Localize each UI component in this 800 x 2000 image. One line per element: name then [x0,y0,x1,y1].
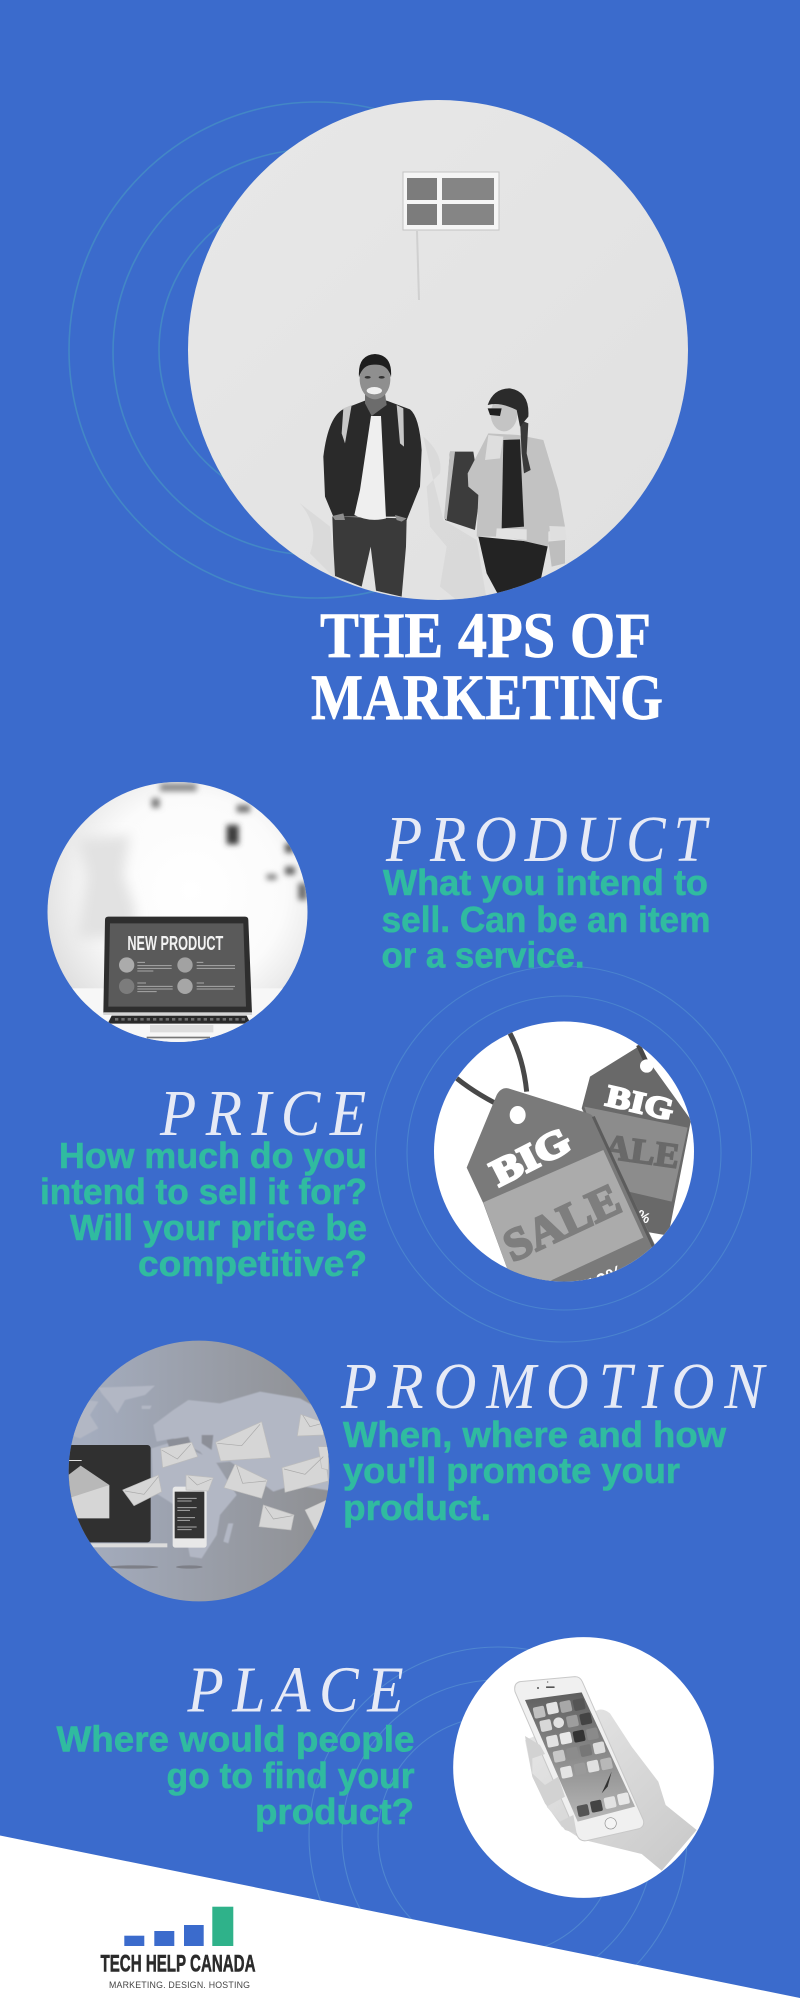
white footer wedge [0,1836,800,2000]
heading: price: PRICE [159,1076,366,1150]
text: place description: go to find your [166,1755,414,1796]
text: place description: Where would people [56,1718,415,1760]
laptop: NEW PRODUCT [127,933,223,955]
heading: place: PLACE [187,1653,404,1726]
decorative rings: place [309,1647,687,2000]
back tag: % [634,1207,653,1227]
hand [525,1710,697,1871]
world map [70,1386,337,1558]
heading: product: PRODUCT [385,802,710,876]
promotion image: emails flying over world map [68,1340,330,1602]
title [311,600,663,734]
back tag: ALE [602,1127,682,1176]
front tag [467,1088,655,1298]
vent [403,172,499,300]
product image: laptop showing new product slide [48,782,308,1042]
text: place description [56,1718,415,1832]
decorative rings: price [376,966,752,1342]
front tag: BIG [484,1120,577,1195]
text: price description [40,1135,367,1284]
logo: tech help canada: MARKETING. DESIGN. HOSTING [109,1980,250,1990]
text: product description [382,862,710,976]
title: MARKETING [311,662,663,734]
place image: hand holding smartphone [445,1630,720,1905]
app icons [533,1698,630,1817]
text: promotion description: product. [343,1487,491,1528]
phone [173,1487,207,1548]
back tag: BIG [603,1079,677,1127]
heading: promotion: PROMOTION [340,1349,767,1423]
text: place description: product? [255,1791,414,1832]
front tag: SALE [495,1174,628,1271]
text: price description: intend to sell it for? [40,1171,367,1212]
front tag: 10% [583,1261,629,1298]
text: promotion description: you'll promote your [343,1450,680,1491]
text: product description: What you intend to [383,862,708,903]
text: price description: competitive? [138,1243,367,1284]
logo: tech help canada: TECH HELP CANADA [100,1950,256,1978]
text: product description: or a service. [382,934,584,976]
man [323,354,422,597]
strings [457,1033,527,1113]
text: price description: How much do you [59,1135,367,1176]
text: promotion description: When, where and how [343,1414,727,1455]
fingers [525,1736,577,1833]
price image: big sale tags [434,1022,694,1282]
envelopes [123,1414,328,1530]
woman [444,388,567,595]
text: promotion description [343,1414,727,1528]
laptop [103,917,252,1038]
phone [515,1677,644,1841]
title: THE 4PS OF [320,600,651,672]
logo: tech help canada [100,1907,256,1990]
hero photo: two people against a wall [188,100,688,600]
laptop [68,1445,168,1548]
logo bars icon [124,1907,233,1946]
text: product description: sell. Can be an item [382,899,710,940]
back tag [582,1045,691,1236]
decorative rings: hero [69,102,565,598]
text: price description: Will your price be [70,1207,367,1248]
